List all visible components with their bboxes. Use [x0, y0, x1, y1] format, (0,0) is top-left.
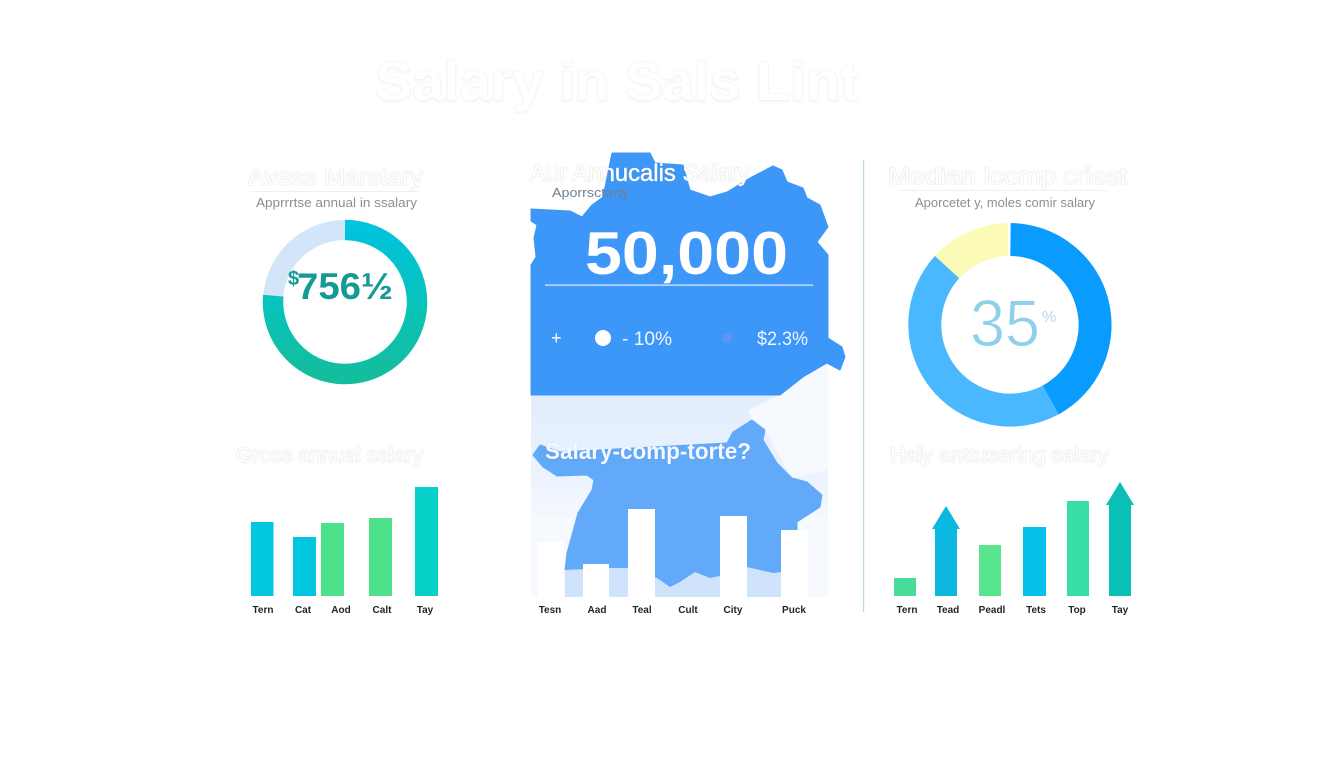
bar chart: gross annual salary	[251, 487, 438, 596]
arrow bar: Tay	[1106, 482, 1134, 596]
arrow bar: Tead	[932, 506, 960, 596]
panel: median comparison	[888, 163, 1127, 410]
heading: salary comparison: Salary-comp-torte?	[545, 438, 751, 464]
panel: gross annual salary	[236, 444, 438, 616]
upper map shape	[531, 153, 845, 395]
bar labels: center: Aad	[588, 605, 606, 616]
donut chart: average salary: $	[288, 268, 299, 290]
bar chart: white bars	[538, 509, 808, 597]
bar labels: gross annual salary	[253, 605, 434, 616]
heading: annual salary: Aur Annucalis Salary	[530, 160, 750, 187]
bar labels: center: Tesn	[539, 605, 561, 616]
donut chart: median comparison: %	[1042, 309, 1056, 326]
heading: hourly salary: Haly anttusering salary	[890, 444, 1110, 467]
bar labels: hourly salary: Tead	[937, 605, 959, 616]
bar labels: hourly salary: Peadl	[979, 605, 1006, 616]
panel: average salary	[248, 164, 423, 374]
heading: median comparison: Median Icomp criest	[888, 163, 1127, 190]
donut chart: average salary	[273, 230, 417, 374]
title: Salary in Sals Lint	[375, 50, 859, 112]
bar labels: gross annual salary: Aod	[331, 605, 351, 616]
bar labels: hourly salary: Tern	[897, 605, 917, 616]
divider under number	[545, 284, 813, 286]
bar labels: gross annual salary: Tay	[417, 605, 434, 616]
panel: hourly salary	[890, 444, 1134, 616]
bar labels: hourly salary: Tay	[1112, 605, 1129, 616]
bar labels: center: Cult	[678, 605, 698, 616]
lower map shape	[533, 420, 822, 587]
subheading: annual salary: Aporrsctarty	[552, 186, 630, 200]
donut chart: average salary: 756½	[297, 266, 393, 307]
bar labels: center: Puck	[782, 605, 806, 616]
stat row	[551, 328, 808, 350]
panel: annual salary map	[530, 153, 845, 616]
stat row: - 10%	[622, 329, 672, 350]
vertical divider line	[863, 160, 864, 612]
bar labels: center	[539, 605, 806, 616]
bar labels: hourly salary: Top	[1068, 605, 1086, 616]
bar chart: hourly salary	[894, 482, 1134, 596]
pale corner wedge	[748, 362, 828, 478]
bar labels: hourly salary: Tets	[1026, 605, 1046, 616]
bar labels: hourly salary	[897, 605, 1129, 616]
bar labels: gross annual salary: Tern	[253, 605, 273, 616]
lower map background	[531, 395, 828, 597]
subheading: average salary: Apprrrtse annual in ssalary	[256, 195, 418, 210]
lower map base	[565, 567, 781, 597]
heading: gross annual salary: Gross annual salary	[236, 444, 423, 467]
donut chart: median comparison: 35	[970, 286, 1040, 360]
stat row: +	[551, 328, 562, 348]
big number: 50,000	[585, 220, 788, 287]
bar labels: gross annual salary: Cat	[295, 605, 312, 616]
subheading: median comparison: Aporcetet y, moles comir salary	[915, 195, 1095, 210]
heading: average salary: Avess Marstary	[248, 164, 423, 191]
bar labels: gross annual salary: Calt	[373, 605, 392, 616]
stat row: $2.3%	[757, 329, 808, 350]
bar labels: center: Teal	[632, 605, 652, 616]
donut chart: median comparison	[925, 240, 1095, 410]
bar labels: center: City	[724, 605, 743, 616]
